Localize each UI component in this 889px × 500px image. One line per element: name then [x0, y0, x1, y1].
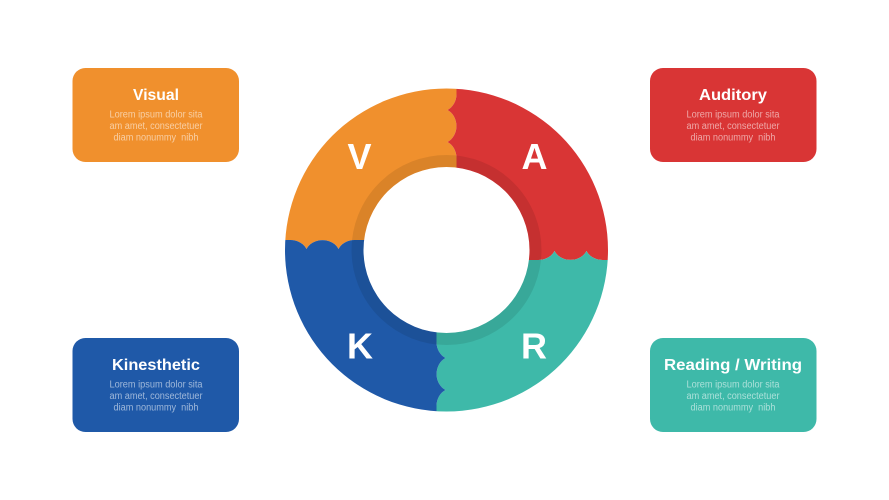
panel: Reading / Writing: [650, 338, 816, 432]
panel: Visual: [72, 68, 239, 162]
text block: Auditory: diam nonummy nibh: [690, 132, 776, 144]
text block: Visual: am amet, consectetuer: [110, 121, 203, 132]
text block: Reading / Writing: diam nonummy nibh: [690, 402, 776, 414]
inner shadow ring: [358, 161, 536, 339]
text block: Kinesthetic: Lorem ipsum dolor sita: [110, 380, 203, 390]
panel: Auditory: [650, 68, 816, 162]
text block: Auditory: Lorem ipsum dolor sita: [686, 110, 780, 120]
text block: Visual: [110, 110, 203, 144]
text block: Kinesthetic: am amet, consectetuer: [110, 391, 203, 402]
letter R: R: [521, 326, 547, 366]
segment: K blue: [285, 240, 446, 412]
segment: A red: [448, 88, 608, 260]
letter A: A: [522, 136, 548, 177]
text block: Auditory: am amet, consectetuer: [686, 121, 780, 132]
text block: Kinesthetic: diam nonummy nibh: [114, 402, 198, 414]
donut chart: [285, 88, 608, 412]
text block: Auditory: [686, 110, 780, 144]
panel: Kinesthetic: [72, 338, 239, 432]
text block: Reading / Writing: am amet, consectetuer: [686, 391, 780, 402]
text block: Reading / Writing: [686, 380, 780, 414]
text block: Reading / Writing: Lorem ipsum dolor sita: [686, 380, 780, 390]
text block: Kinesthetic: [110, 380, 203, 414]
segment: R teal: [436, 251, 608, 412]
heading: Kinesthetic: Kinesthetic: [112, 357, 200, 374]
segment: V orange: [285, 88, 456, 249]
heading: Auditory: Auditory: [699, 87, 767, 104]
heading: Reading / Writing: Reading / Writing: [664, 357, 802, 374]
text block: Visual: Lorem ipsum dolor sita: [110, 110, 203, 120]
letter K: K: [347, 326, 373, 366]
heading: Visual: Visual: [133, 87, 179, 104]
text block: Visual: diam nonummy nibh: [114, 132, 198, 144]
letter V: V: [347, 136, 372, 177]
VARK infographic: [72, 68, 816, 432]
